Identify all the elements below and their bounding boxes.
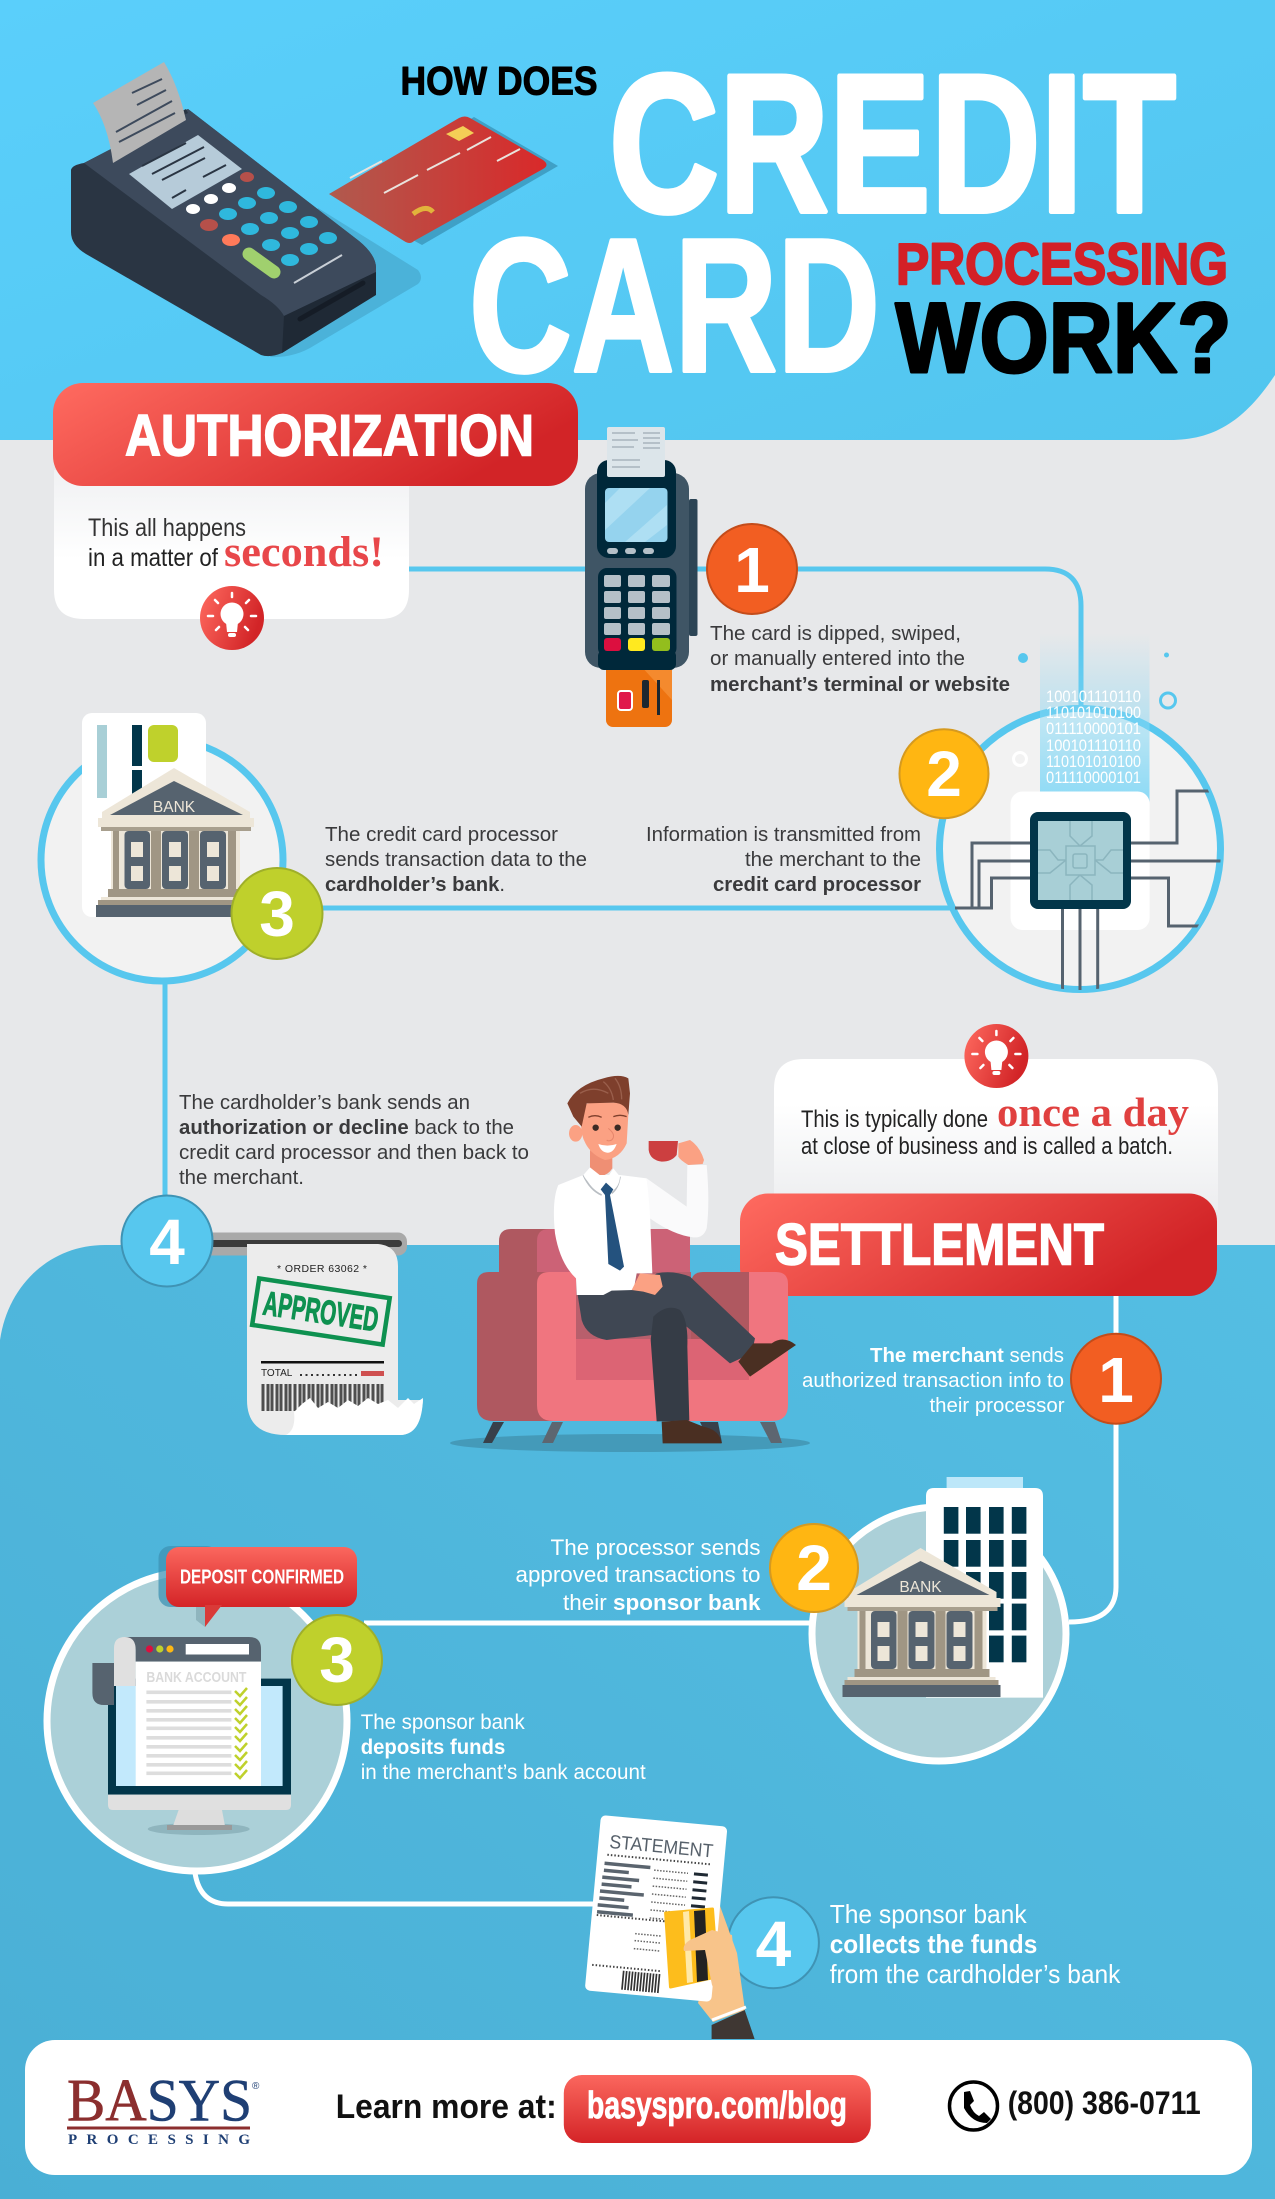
illustration: man in armchair xyxy=(450,1076,810,1452)
icon: upright payment terminal xyxy=(585,427,698,727)
heading: settlement xyxy=(740,1194,1217,1296)
decorative data dots xyxy=(1014,652,1176,766)
binary digits: 100101110110 xyxy=(1046,688,1141,706)
heading: authorization xyxy=(53,383,578,486)
title: card: CARD xyxy=(469,200,880,412)
settlement step 2 text xyxy=(516,1535,761,1615)
step 3 text: The credit card processor xyxy=(325,824,558,846)
settlement step 3 text: in the merchant’s bank account xyxy=(361,1761,646,1784)
office tower xyxy=(926,1477,1043,1698)
step 4 badge: 4 xyxy=(149,1206,185,1278)
settlement step 2 text: their sponsor bank xyxy=(563,1590,761,1615)
heading: settlement: SETTLEMENT xyxy=(775,1212,1104,1278)
statement paper: STATEMENT xyxy=(609,1832,714,1862)
armchair xyxy=(477,1229,788,1443)
callout text: This all happens xyxy=(88,514,246,542)
callout: deposit confirmed xyxy=(158,1546,357,1627)
step 3 text: cardholder’s bank. xyxy=(325,874,505,896)
settlement step 3 text: deposits funds xyxy=(361,1736,505,1759)
approved receipt xyxy=(247,1244,423,1435)
step 1 badge: 1 xyxy=(734,534,770,606)
settlement step 2 text: approved transactions to xyxy=(516,1562,760,1587)
hand fingers xyxy=(684,1930,737,2004)
binary digits: 011110000101 xyxy=(1046,720,1141,738)
step 4 text: authorization or decline back to the xyxy=(179,1117,514,1139)
step 4 text xyxy=(179,1092,529,1189)
callout box xyxy=(774,1059,1218,1210)
step 4 text: credit card processor and then back to xyxy=(179,1142,529,1164)
connector line: settlement to circle xyxy=(1069,1296,1116,1622)
circuit lines xyxy=(950,791,1225,995)
approved stamp xyxy=(252,1278,390,1345)
bank account document: BANK ACCOUNT xyxy=(146,1670,247,1686)
settlement step 1 badge: 1 xyxy=(1098,1344,1134,1416)
settlement step 1 text: The merchant sends xyxy=(870,1345,1064,1367)
icon: lightbulb xyxy=(964,1024,1028,1088)
callout text: once a day xyxy=(997,1089,1190,1135)
step 3 text: sends transaction data to the xyxy=(325,849,587,871)
callout text: in a matter of xyxy=(88,544,218,572)
binary digits: 100101110110 xyxy=(1046,737,1141,755)
credit card behind bank xyxy=(82,713,206,917)
step 3 badge: 3 xyxy=(259,878,295,950)
connector line: step 2 to step 3 xyxy=(322,906,955,910)
button: blog url: basyspro.com/blog xyxy=(587,2085,847,2127)
panel: chip circle xyxy=(940,633,1225,995)
chip xyxy=(1030,812,1131,909)
bank account document xyxy=(92,1637,261,1786)
order number: * ORDER 63062 * xyxy=(277,1263,367,1275)
icon: monitor xyxy=(108,1679,291,1835)
step 2 text: the merchant to the xyxy=(745,849,921,871)
data stream xyxy=(1040,633,1150,813)
step 1 badge xyxy=(707,524,797,614)
panel: sponsor bank circle xyxy=(812,1477,1066,1761)
icon: bank building: BANK xyxy=(153,799,196,816)
lower blue background xyxy=(0,1245,1275,2199)
torn edge xyxy=(286,1398,423,1435)
button: blog url xyxy=(564,2075,871,2143)
logo: basys processing: ® xyxy=(252,2081,260,2092)
callout text xyxy=(88,514,384,576)
settlement step 4 badge xyxy=(728,1897,819,1988)
heading: authorization: AUTHORIZATION xyxy=(125,404,534,468)
hand back xyxy=(698,1906,745,2022)
approved stamp: APPROVED xyxy=(261,1285,381,1339)
settlement step 2 badge: 2 xyxy=(796,1532,832,1604)
total row: TOTAL xyxy=(261,1368,293,1379)
step 4 badge xyxy=(122,1196,212,1286)
step 2 text: credit card processor xyxy=(713,874,921,896)
connector line: sponsor bank to step 3 xyxy=(364,1620,811,1626)
title: work: WORK? xyxy=(896,282,1232,393)
panel: settlement callout xyxy=(774,1024,1218,1210)
logo: basys processing: PROCESSING xyxy=(68,2132,250,2148)
step 2 text: Information is transmitted from xyxy=(646,824,921,846)
title xyxy=(400,34,1232,412)
step 1 text: The card is dipped, swiped, xyxy=(710,623,961,645)
panel: authorization callout xyxy=(54,470,409,650)
chip backing xyxy=(1011,792,1150,930)
step 1 text xyxy=(710,623,1010,696)
yellow card xyxy=(666,1909,718,1987)
icon: red credit card xyxy=(329,116,558,245)
settlement step 4 text: The sponsor bank xyxy=(830,1899,1028,1929)
settlement step 2 badge xyxy=(770,1524,858,1612)
settlement step 1 text: authorized transaction info to xyxy=(802,1370,1064,1392)
connector line: callout to step 1 to step 2 xyxy=(409,569,1081,712)
phone number: (800) 386-0711 xyxy=(1008,2085,1201,2121)
callout text: This is typically done xyxy=(801,1106,988,1133)
binary digits: 110101010100 xyxy=(1046,753,1141,771)
floor shadow xyxy=(450,1434,810,1452)
statement paper xyxy=(585,1815,727,2002)
connector line: circle 3 to step 4 xyxy=(162,981,168,1200)
step 2 text xyxy=(646,824,921,896)
settlement step 3 text xyxy=(361,1711,646,1784)
callout box xyxy=(54,470,409,619)
settlement step 1 text xyxy=(802,1345,1065,1417)
callout text: at close of business and is called a batch. xyxy=(801,1133,1173,1160)
icon: bank building xyxy=(96,768,254,917)
binary digits: 011110000101 xyxy=(1046,769,1141,787)
step 3 badge xyxy=(232,868,322,959)
panel: cardholder bank circle xyxy=(41,713,283,981)
man xyxy=(554,1076,796,1443)
settlement step 3 text: The sponsor bank xyxy=(361,1711,525,1734)
title: how does: HOW DOES xyxy=(400,60,598,104)
barcode xyxy=(263,1384,382,1411)
callout text: seconds! xyxy=(224,529,384,576)
step 1 text: or manually entered into the xyxy=(710,648,965,670)
settlement step 3 badge: 3 xyxy=(319,1624,355,1696)
settlement step 1 text: their processor xyxy=(930,1395,1065,1417)
statement held in hand xyxy=(585,1815,755,2039)
learn more label: Learn more at: xyxy=(336,2088,557,2126)
settlement step 2 text: The processor sends xyxy=(550,1535,760,1560)
callout text xyxy=(801,1089,1190,1160)
icon: phone xyxy=(950,2082,998,2130)
panel: deposit circle xyxy=(47,1571,347,1871)
title: processing: PROCESSING xyxy=(896,232,1228,297)
icon: lightbulb xyxy=(200,586,264,650)
header blue background xyxy=(0,0,1275,440)
step 2 badge xyxy=(900,729,988,818)
step 4 text: the merchant. xyxy=(179,1167,304,1189)
icon: bank building: BANK xyxy=(899,1579,942,1596)
callout: deposit confirmed: DEPOSIT CONFIRMED xyxy=(180,1566,344,1588)
panel: footer xyxy=(25,2040,1252,2175)
step 2 badge: 2 xyxy=(926,738,962,810)
printer slot xyxy=(200,1232,407,1256)
settlement step 3 badge xyxy=(292,1615,382,1705)
suit sleeve xyxy=(712,2007,755,2039)
step 4 text: The cardholder’s bank sends an xyxy=(179,1092,470,1114)
settlement step 4 text xyxy=(830,1899,1121,1989)
settlement step 4 text: from the cardholder’s bank xyxy=(830,1959,1121,1989)
step 1 text: merchant’s terminal or website xyxy=(710,674,1010,696)
step 3 text xyxy=(325,824,587,896)
settlement step 4 badge: 4 xyxy=(756,1908,792,1980)
settlement step 1 badge xyxy=(1071,1334,1161,1424)
connector line: deposit circle to statement xyxy=(195,1873,594,1904)
icon: bank building xyxy=(842,1548,1000,1697)
binary digits xyxy=(1046,688,1141,787)
icon: card terminal isometric xyxy=(71,62,421,357)
settlement step 4 text: collects the funds xyxy=(830,1929,1037,1959)
binary digits: 110101010100 xyxy=(1046,704,1141,722)
logo: basys processing: BASYS xyxy=(67,2068,252,2134)
